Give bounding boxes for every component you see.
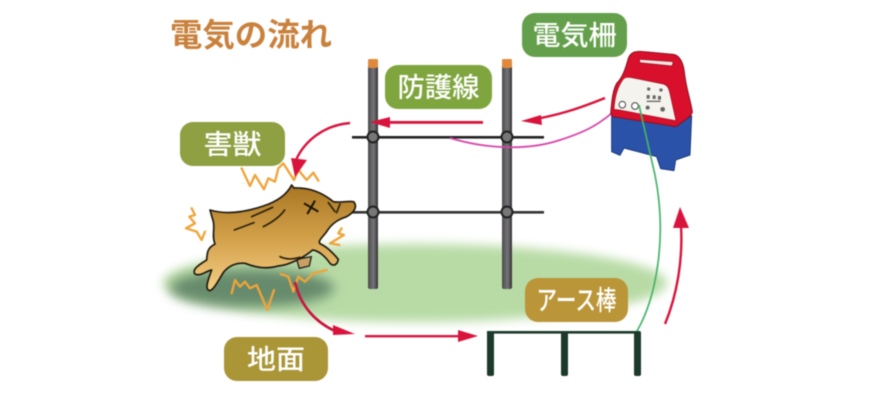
arrow: up to energizer bbox=[665, 207, 689, 324]
earth rods bbox=[487, 331, 641, 376]
far leg bbox=[297, 257, 311, 268]
ground ellipse bbox=[163, 244, 667, 322]
label: ground bbox=[224, 337, 328, 381]
energizer bbox=[611, 51, 692, 171]
title: 電気の流れ bbox=[170, 17, 332, 53]
body bbox=[194, 185, 355, 291]
label: electric fence unit bbox=[522, 13, 627, 57]
controls bbox=[646, 87, 665, 112]
boar bbox=[186, 163, 355, 310]
arrow: ground to earth rod bbox=[365, 330, 478, 342]
arrow: wire to animal bbox=[291, 123, 350, 177]
label: earth rod bbox=[525, 278, 628, 322]
fence bbox=[352, 59, 544, 289]
arrow: animal into ground bbox=[295, 282, 355, 335]
label: protection wire bbox=[385, 65, 492, 109]
left post bbox=[368, 59, 378, 289]
label: electric fence unit: 電気柵 bbox=[532, 21, 616, 51]
panel bbox=[614, 77, 676, 121]
terminals bbox=[619, 101, 638, 109]
dead eye bbox=[304, 201, 318, 214]
handle hole bbox=[639, 59, 673, 66]
label: pest animal bbox=[180, 122, 285, 166]
label: pest animal: 害獣 bbox=[204, 130, 262, 160]
pink wire bbox=[450, 105, 621, 147]
label: protection wire: 防護線 bbox=[398, 73, 480, 103]
base bbox=[612, 116, 692, 171]
fur marks bbox=[234, 203, 340, 259]
label: earth rod: アース棒 bbox=[536, 286, 616, 316]
right post bbox=[502, 59, 512, 289]
red case bbox=[611, 51, 692, 127]
arrow: energizer to fence bbox=[521, 98, 605, 125]
label: ground: 地面 bbox=[247, 345, 305, 375]
sparks bbox=[186, 163, 344, 310]
green wire bbox=[637, 105, 660, 331]
wire clips bbox=[368, 132, 512, 218]
bottom wire bbox=[352, 211, 544, 214]
top wire bbox=[352, 136, 544, 139]
arrow: along wire bbox=[370, 117, 483, 128]
